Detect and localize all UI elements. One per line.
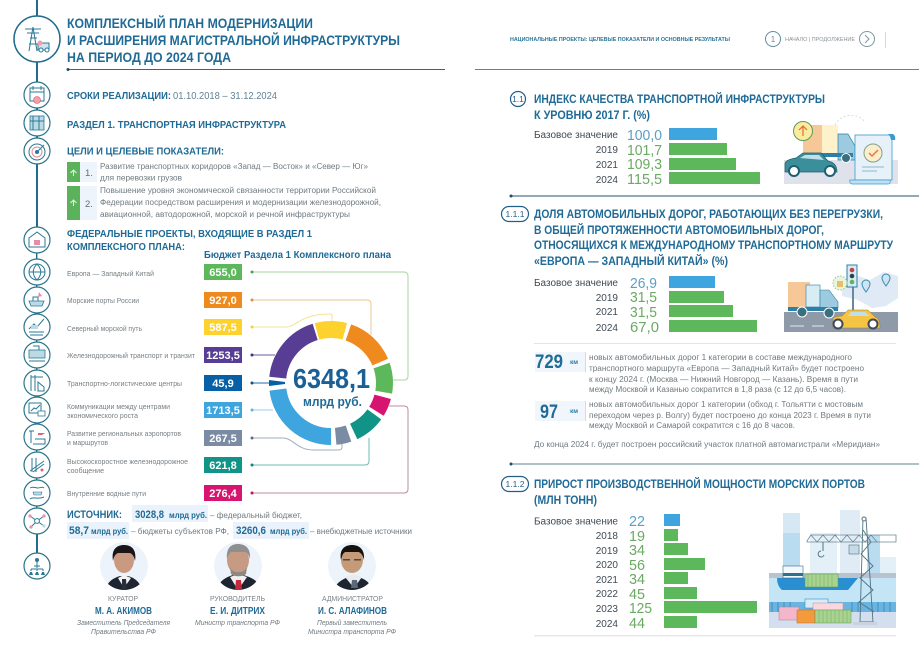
heading 1.1.2: (МЛН ТОНН) bbox=[534, 495, 597, 507]
bar chart 1.1.1: 31,5 bbox=[630, 290, 657, 306]
row: communications: Коммуникации между центрами bbox=[67, 402, 170, 411]
row: high-speed rail: 621,8 bbox=[209, 460, 237, 472]
icon: rail train bbox=[24, 342, 50, 368]
running header bbox=[510, 32, 886, 48]
goal 2: авиационной, автодорожной, морской и речной инфраструктуры bbox=[100, 210, 350, 219]
portrait: curator bbox=[100, 542, 148, 590]
goal 1 bbox=[67, 162, 369, 182]
bar chart 1.1.2 bbox=[534, 514, 757, 632]
portrait: administrator bbox=[328, 542, 376, 590]
row: railway transport bbox=[67, 347, 242, 363]
illustration: sea port with crane and ship bbox=[769, 510, 896, 628]
fact: 729 km: между Москвой и Казанью сократится в 1,8 раза (с 12 до 6,5 часов). bbox=[589, 385, 846, 394]
budget heading: Бюджет Раздела 1 Комплексного плана bbox=[204, 250, 391, 261]
icon: globe bbox=[24, 259, 50, 285]
badge 1.1.1: 1.1.1 bbox=[506, 209, 525, 219]
fact: 97 km bbox=[535, 400, 871, 430]
row: northern sea route: Северный морской путь bbox=[67, 324, 142, 333]
bar chart 1.1.1 bbox=[534, 276, 757, 336]
portrait: head of project bbox=[214, 542, 262, 590]
bar chart 1.1.2: 45 bbox=[629, 587, 645, 603]
row: communications: экономического роста bbox=[67, 411, 139, 420]
title: НА ПЕРИОД ДО 2024 ГОДА bbox=[67, 49, 231, 65]
goal 1: для перевозки грузов bbox=[100, 174, 182, 182]
goal 1: Развитие транспортных коридоров «Запад — Восток» и «Север — Юг» bbox=[100, 162, 369, 171]
icon: calendar bbox=[24, 82, 50, 108]
bar chart 1.1.1: 31,5 bbox=[630, 305, 657, 321]
heading 1.1.1: «ЕВРОПА — ЗАПАДНЫЙ КИТАЙ» (%) bbox=[534, 255, 728, 268]
fact: 729 km bbox=[535, 352, 865, 394]
section 1.1 bbox=[510, 92, 898, 188]
administrator caption: АДМИНИСТРАТОР bbox=[322, 594, 383, 603]
fact: 97 km: переходом через р. Волгу) будет построено до конца 2023 г. Время в пути bbox=[589, 411, 871, 420]
note: Meridian motorway: До конца 2024 г. будет построен российский участок платной автомагистрали «Меридиан» bbox=[534, 440, 881, 449]
goal 2 bbox=[67, 186, 381, 220]
bar chart 1.1.2: 56 bbox=[629, 558, 645, 574]
implementation dates bbox=[67, 90, 277, 102]
bar chart 1.1.2: 34 bbox=[629, 572, 645, 588]
bar chart 1.1.2: 2018 bbox=[596, 531, 618, 542]
goals heading: ЦЕЛИ И ЦЕЛЕВЫЕ ПОКАЗАТЕЛИ: bbox=[67, 146, 224, 158]
funding sources: 3260,6 bbox=[236, 525, 266, 537]
bar chart 1.1.1: 26,9 bbox=[630, 276, 657, 292]
donut unit: млрд руб. bbox=[303, 394, 362, 409]
row: Europe — Western China: Европа — Западный Китай bbox=[67, 269, 154, 278]
row: railway transport: 1253,5 bbox=[206, 350, 240, 362]
funding sources: ИСТОЧНИК: bbox=[67, 509, 122, 521]
bar chart 1.1.2: 2021 bbox=[596, 575, 618, 586]
bar chart 1.1.1: 2019 bbox=[596, 293, 618, 304]
bar chart 1.1.2: 22 bbox=[629, 514, 645, 530]
title bbox=[67, 14, 400, 65]
head caption: РУКОВОДИТЕЛЬ bbox=[210, 594, 265, 603]
fact: 729 km: транспортного маршрута «Европа — Западный Китай» будет построено bbox=[589, 364, 865, 373]
administrator caption: И. С. АЛАФИНОВ bbox=[318, 606, 387, 617]
row: inland waterways bbox=[67, 485, 242, 501]
funding sources: млрд руб. bbox=[270, 527, 307, 536]
funding sources: 3028,8 bbox=[135, 509, 164, 521]
icon: airports bbox=[24, 424, 50, 450]
title: И РАСШИРЕНИЯ МАГИСТРАЛЬНОЙ ИНФРАСТРУКТУРЫ bbox=[67, 31, 400, 48]
bar chart 1.1.1: 2021 bbox=[596, 307, 618, 318]
row: communications bbox=[67, 402, 242, 420]
fact: 729 km: 729 bbox=[535, 352, 563, 373]
heading 1.1.2 bbox=[534, 478, 865, 507]
funding sources: 58,7 bbox=[69, 525, 89, 537]
section 1.1.2 bbox=[502, 476, 896, 632]
icon: power pylon and truck bbox=[14, 16, 60, 62]
bar chart 1.1.1: 2024 bbox=[596, 323, 618, 334]
badge 1.1: 1.1 bbox=[512, 94, 524, 104]
row: Europe — Western China bbox=[67, 264, 242, 280]
funding sources: – внебюджетные источники bbox=[310, 527, 412, 536]
bar chart 1.1: 109,3 bbox=[627, 157, 662, 173]
heading 1.1.1: В ОБЩЕЙ ПРОТЯЖЕННОСТИ АВТОМОБИЛЬНЫХ ДОРОГ, bbox=[534, 224, 824, 237]
bar chart 1.1.2: 2024 bbox=[596, 619, 618, 630]
row: regional airports: и маршрутов bbox=[67, 438, 108, 447]
goal 1: 1. bbox=[85, 168, 93, 179]
badge 1.1.1 bbox=[502, 206, 528, 222]
bar chart 1.1 bbox=[534, 128, 760, 188]
icon: team hierarchy bbox=[24, 553, 50, 579]
row: northern sea route: 587,5 bbox=[209, 322, 237, 334]
fact: 729 km: к концу 2024 г. (Москва — Нижний Новгород — Казань). Время в пути bbox=[589, 375, 858, 384]
running header: 1 bbox=[771, 35, 776, 44]
row: high-speed rail bbox=[67, 457, 242, 475]
fact: 97 km: между Москвой и Самарой сократится с 16 до 8 часов. bbox=[589, 421, 795, 430]
bar chart 1.1: 100,0 bbox=[627, 128, 662, 144]
icon: transport infrastructure bbox=[24, 110, 50, 136]
bar chart 1.1.2: 44 bbox=[629, 616, 645, 632]
heading 1.1.1: ДОЛЯ АВТОМОБИЛЬНЫХ ДОРОГ, РАБОТАЮЩИХ БЕЗ ПЕРЕГРУЗКИ, bbox=[534, 209, 883, 221]
connectors bbox=[250, 270, 408, 494]
icon: northern route bbox=[24, 314, 50, 340]
icon: target bbox=[24, 138, 50, 164]
bar chart 1.1.1: 67,0 bbox=[630, 320, 659, 336]
head caption: Министр транспорта РФ bbox=[195, 618, 280, 627]
curator caption: М. А. АКИМОВ bbox=[95, 606, 152, 617]
federal projects heading: ФЕДЕРАЛЬНЫЕ ПРОЕКТЫ, ВХОДЯЩИЕ В РАЗДЕЛ 1 bbox=[67, 228, 312, 240]
row: inland waterways: 276,4 bbox=[209, 488, 238, 500]
section heading: РАЗДЕЛ 1. ТРАНСПОРТНАЯ ИНФРАСТРУКТУРА bbox=[67, 119, 286, 131]
curator caption: КУРАТОР bbox=[108, 594, 138, 603]
bar chart 1.1.2: Базовое значение bbox=[534, 516, 618, 528]
icon: source network bbox=[24, 508, 50, 534]
icon: economic growth chart bbox=[24, 397, 50, 423]
row: logistics centres: Транспортно-логистические центры bbox=[67, 379, 182, 388]
bar chart 1.1: 2021 bbox=[596, 160, 618, 171]
icon: logistics centres bbox=[24, 370, 50, 396]
running header: НАЦИОНАЛЬНЫЕ ПРОЕКТЫ: ЦЕЛЕВЫЕ ПОКАЗАТЕЛИ И ОСНОВНЫЕ РЕЗУЛЬТАТЫ bbox=[510, 37, 731, 43]
implementation dates: 01.10.2018 – 31.12.2024 bbox=[173, 90, 277, 102]
row: railway transport: Железнодорожный транспорт и транзит bbox=[67, 351, 196, 360]
title: КОМПЛЕКСНЫЙ ПЛАН МОДЕРНИЗАЦИИ bbox=[67, 14, 313, 31]
funding sources: – бюджеты субъектов РФ, bbox=[131, 527, 229, 536]
running header: НАЧАЛО | ПРОДОЛЖЕНИЕ bbox=[785, 37, 855, 43]
bar chart 1.1.1: Базовое значение bbox=[534, 278, 618, 289]
row: regional airports: 267,5 bbox=[209, 433, 237, 445]
row: regional airports: Развитие региональных аэропортов bbox=[67, 429, 181, 438]
administrator caption bbox=[308, 594, 396, 636]
icon: sea port bbox=[24, 287, 50, 313]
goal 2: 2. bbox=[85, 199, 93, 210]
federal projects heading bbox=[67, 228, 312, 253]
donut chart bbox=[269, 330, 384, 436]
fact: 729 km: км bbox=[570, 359, 578, 366]
timeline spine bbox=[36, 0, 38, 555]
funding sources: млрд руб. bbox=[91, 527, 128, 536]
heading 1.1: К УРОВНЮ 2017 Г. (%) bbox=[534, 110, 650, 122]
row: high-speed rail: Высокоскоростное железнодорожное bbox=[67, 457, 188, 466]
icon: waterways bbox=[24, 480, 50, 506]
badge 1.1.2: 1.1.2 bbox=[506, 479, 525, 489]
administrator caption: Министра транспорта РФ bbox=[308, 627, 396, 636]
bar chart 1.1: 2024 bbox=[596, 175, 618, 186]
illustration: truck, traffic light and car bbox=[784, 265, 898, 332]
heading 1.1 bbox=[534, 93, 825, 122]
funding sources: млрд руб. bbox=[169, 511, 207, 520]
fact: 97 km: км bbox=[570, 408, 578, 415]
heading 1.1.1 bbox=[534, 209, 894, 268]
fact: 97 km: 97 bbox=[540, 402, 558, 423]
bar chart 1.1.2: 2019 bbox=[596, 546, 618, 557]
implementation dates: СРОКИ РЕАЛИЗАЦИИ: bbox=[67, 90, 171, 102]
bar chart 1.1: 115,5 bbox=[627, 172, 662, 188]
section 1.1.1 bbox=[502, 206, 898, 336]
illustration: truck, car and document bbox=[784, 115, 898, 184]
fact: 729 km: новых автомобильных дорог 1 категории в составе международного bbox=[589, 353, 853, 362]
bar chart 1.1: Базовое значение bbox=[534, 130, 618, 141]
bar chart 1.1.2: 125 bbox=[629, 601, 652, 617]
row: sea ports: Морские порты России bbox=[67, 296, 139, 305]
curator caption: Правительства РФ bbox=[91, 627, 156, 636]
row: logistics centres bbox=[67, 375, 242, 391]
goal 2: Повышение уровня экономической связанности территории Российской bbox=[100, 186, 376, 195]
curator caption: Заместитель Председателя bbox=[77, 618, 170, 627]
row: sea ports bbox=[67, 292, 242, 308]
administrator caption: Первый заместитель bbox=[317, 618, 387, 627]
icon: high-speed rail bbox=[24, 452, 50, 478]
icon: federal projects bbox=[24, 227, 50, 253]
row: regional airports bbox=[67, 429, 242, 447]
bar chart 1.1: 101,7 bbox=[627, 143, 662, 159]
badge 1.1 bbox=[510, 92, 526, 106]
bar chart 1.1: 2019 bbox=[596, 145, 618, 156]
head caption bbox=[195, 594, 280, 627]
head caption: Е. И. ДИТРИХ bbox=[210, 606, 265, 617]
row: sea ports: 927,0 bbox=[209, 295, 237, 307]
bar chart 1.1.2: 34 bbox=[629, 543, 645, 559]
curator caption bbox=[77, 594, 170, 636]
row: northern sea route bbox=[67, 319, 242, 335]
bar chart 1.1.2: 2020 bbox=[596, 560, 618, 571]
fact: 97 km: новых автомобильных дорог 1 категории (обход г. Тольятти с мостовым bbox=[589, 400, 863, 409]
bar chart 1.1.2: 2023 bbox=[596, 604, 618, 615]
badge 1.1.2 bbox=[502, 476, 528, 492]
row: high-speed rail: сообщение bbox=[67, 466, 104, 475]
bar chart 1.1.2: 19 bbox=[629, 529, 645, 545]
funding sources bbox=[67, 505, 412, 539]
row: logistics centres: 45,9 bbox=[212, 378, 234, 390]
heading 1.1: ИНДЕКС КАЧЕСТВА ТРАНСПОРТНОЙ ИНФРАСТРУКТУРЫ bbox=[534, 93, 825, 106]
federal projects heading: КОМПЛЕКСНОГО ПЛАНА: bbox=[67, 241, 185, 253]
donut total: 6348,1 bbox=[293, 363, 370, 394]
heading 1.1.2: ПРИРОСТ ПРОИЗВОДСТВЕННОЙ МОЩНОСТИ МОРСКИХ ПОРТОВ bbox=[534, 478, 865, 491]
funding sources: – федеральный бюджет, bbox=[210, 511, 302, 520]
row: inland waterways: Внутренние водные пути bbox=[67, 489, 146, 498]
goal 2: Федерации посредством расширения и модернизации железнодорожной, bbox=[100, 198, 381, 207]
bar chart 1.1.2: 2022 bbox=[596, 589, 618, 600]
row: Europe — Western China: 655,0 bbox=[209, 267, 237, 279]
row: communications: 1713,5 bbox=[206, 405, 240, 417]
